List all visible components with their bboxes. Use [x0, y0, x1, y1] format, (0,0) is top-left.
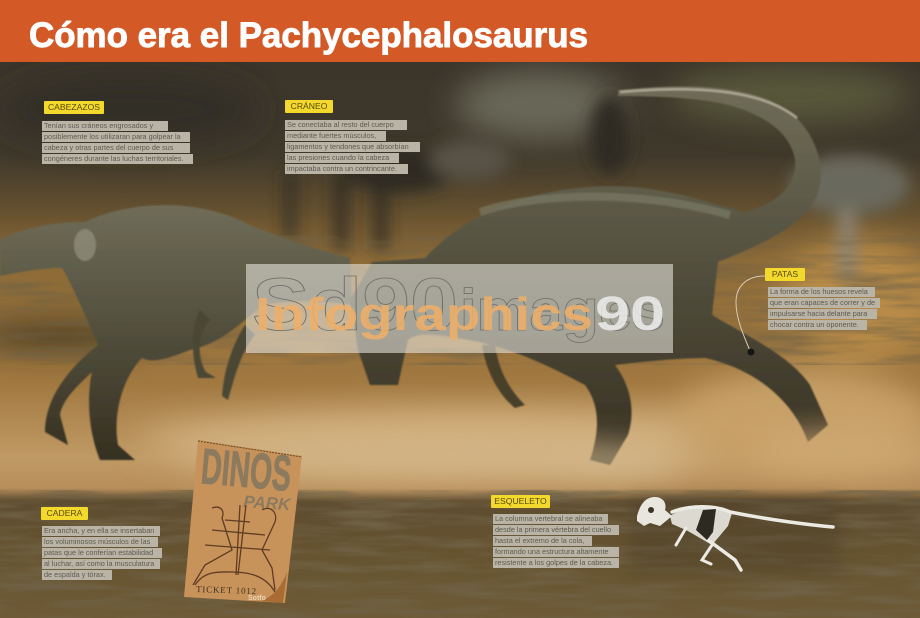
- text block: esqueleto: resistente a los golpes de la cabeza.: [495, 558, 613, 567]
- ticket: Dinos Park: PARK: [243, 492, 293, 514]
- text block: cadera: patas que le conferían estabilidad: [44, 548, 153, 557]
- text block: cráneo: las presiones cuando la cabeza: [287, 153, 389, 162]
- left dinosaur: [0, 205, 352, 460]
- text block: cabezazos: congéneres durante las luchas territoriales.: [44, 154, 184, 163]
- label: cráneo: CRÁNEO: [291, 101, 327, 111]
- text block: cráneo: Se conectaba al resto del cuerpo: [287, 120, 394, 129]
- watermark: [246, 263, 673, 353]
- text block: cabezazos: cabeza y otras partes del cuerpo de sus: [44, 143, 173, 152]
- ticket: Dinos Park: TICKET 1012: [196, 584, 257, 596]
- text block: cráneo: impactaba contra un contrincante.: [287, 164, 397, 173]
- ticket: Dinos Park: DINOS: [199, 438, 294, 502]
- label: patas: PATAS: [772, 269, 798, 279]
- text block: cabezazos: Tenían sus cráneos engrosados y: [44, 121, 153, 130]
- text block: esqueleto: hasta el extremo de la cola,: [495, 536, 584, 545]
- label: cabezazos: CABEZAZOS: [48, 102, 100, 112]
- ticket: Dinos Park: [184, 438, 302, 603]
- text block: cadera: al luchar, así como la musculatura: [44, 559, 154, 568]
- text block: esqueleto: desde la primera vértebra del cuello: [495, 525, 611, 534]
- watermark: Sd90: [252, 263, 458, 346]
- text block: cráneo: mediante fuertes músculos,: [287, 131, 376, 140]
- text block: patas: [768, 287, 880, 330]
- ticket: Dinos Park: Sotfo: [248, 595, 266, 602]
- label: esqueleto: ESQUELETO: [494, 496, 547, 506]
- text block: cráneo: [285, 120, 420, 174]
- text block: esqueleto: formando una estructura altamente: [495, 547, 609, 556]
- text block: patas: La forma de los huesos revela: [770, 287, 868, 296]
- label: cadera: [41, 507, 88, 520]
- text block: patas: impulsarse hacia delante para: [770, 309, 867, 318]
- dust cloud: [180, 430, 920, 477]
- text block: cadera: de espalda y tórax.: [44, 570, 106, 579]
- title bar: Cómo era el Pachycephalosaurus: [29, 16, 588, 55]
- text block: esqueleto: [493, 514, 619, 568]
- text block: cráneo: ligamentos y tendones que absorbían: [287, 142, 409, 151]
- label: patas: [765, 268, 805, 281]
- skeleton: [630, 495, 840, 575]
- watermark: images: [460, 278, 665, 343]
- text block: cadera: [42, 526, 162, 580]
- text block: cadera: Era ancha, y en ella se insertaban: [44, 526, 154, 535]
- ticket pelvis drawing: [193, 505, 276, 592]
- right dinosaur: [350, 86, 828, 465]
- watermark: 90: [595, 288, 665, 341]
- text block: cadera: los voluminosos músculos de las: [44, 537, 150, 546]
- label: cráneo: [285, 100, 333, 113]
- text block: cabezazos: posiblemente los utilizaran para golpear la: [44, 132, 181, 141]
- watermark: Infographics: [255, 288, 593, 340]
- callout line: patas: [736, 276, 765, 356]
- text block: patas: que eran capaces de correr y de: [770, 298, 875, 307]
- label: cadera: CADERA: [47, 508, 82, 518]
- label: cabezazos: [44, 101, 104, 114]
- title bar: [0, 0, 920, 62]
- text block: patas: chocar contra un oponente.: [770, 320, 859, 329]
- text block: cabezazos: [42, 121, 193, 164]
- label: esqueleto: [491, 495, 550, 508]
- text block: esqueleto: La columna vertebral se alineaba: [495, 514, 602, 523]
